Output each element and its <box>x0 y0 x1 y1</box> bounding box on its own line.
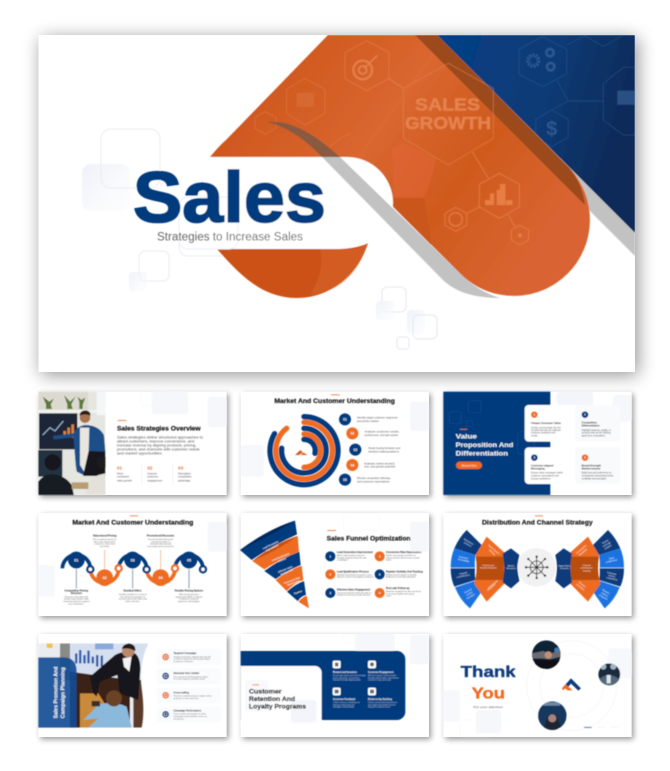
card 3: Customer-aligned <box>531 463 554 467</box>
feature items: Deliver personalized experiences <box>368 701 397 704</box>
funnel items: 2 <box>329 572 331 576</box>
tagline: For your attention <box>473 705 504 709</box>
concentric ring chart <box>270 417 338 485</box>
numbered list: and customer expectations <box>357 480 390 483</box>
left fan <box>451 530 519 608</box>
card 3: Ensure value messages match <box>531 472 564 475</box>
funnel: Improvement <box>265 544 279 552</box>
funnel: Optimization <box>287 579 301 587</box>
slide heading: Customer <box>249 689 282 695</box>
navy panel <box>443 392 550 495</box>
gray diagonal shadow <box>322 157 500 298</box>
funnel items: bottlenecks and drop-off points. <box>386 576 416 579</box>
step captions: stimulate demand and <box>150 543 172 546</box>
stat columns: advantage <box>178 478 191 482</box>
accent dash <box>327 529 336 532</box>
navy band <box>241 651 405 720</box>
decorative squares <box>141 392 177 406</box>
step captions: Combine products or services <box>118 593 147 596</box>
text on hexagon: sales growth <box>405 98 491 130</box>
slide 6: distribution and channel strategy <box>443 513 634 618</box>
blue triangle panel <box>437 35 635 233</box>
fan labels: Omnichannel <box>488 580 499 590</box>
slide 9: thank you: You <box>472 685 505 702</box>
card 4: consistently showcasing brand <box>582 474 614 477</box>
step captions: their value delivered to <box>94 540 116 543</box>
pale square over the pill <box>179 197 238 249</box>
funnel: Pipeline <box>294 590 303 595</box>
fan labels: programs <box>599 594 608 601</box>
stat columns: Strengthen <box>178 471 192 475</box>
fan labels: Reseller <box>602 589 610 595</box>
fan labels: integration <box>487 582 497 592</box>
feature items: Maintain regular communication <box>368 674 396 677</box>
feature items: Encourage repeat purchases through <box>333 674 366 677</box>
photo circle: handshake bottom <box>538 701 567 730</box>
fan labels: performance <box>581 567 594 570</box>
numbered list: Evaluate market demand, <box>364 462 395 465</box>
fan labels: partners <box>463 541 472 548</box>
icons on blue panel: $ <box>546 118 557 140</box>
card 3: customer expectations and <box>531 474 560 477</box>
hero slide <box>38 35 638 375</box>
slide 3: value proposition and differentiation <box>443 392 634 497</box>
step captions: payment flexibility to appeal <box>176 595 203 598</box>
feature items: long-term customer value. <box>368 706 391 709</box>
fan labels: integration <box>578 547 588 557</box>
darker forearm tone <box>392 198 446 260</box>
logo <box>562 678 581 691</box>
card 2: Competitive <box>582 421 597 425</box>
stat columns: 01 <box>117 466 123 471</box>
card 4: Build trust and preference by <box>582 472 612 475</box>
fan labels: coverage <box>602 541 612 548</box>
body text <box>117 435 203 455</box>
feature items: points, discounts, or exclusive <box>333 676 360 679</box>
body text: promotions, and channels with customer needs <box>117 447 200 451</box>
numbered list: 05 <box>343 478 347 482</box>
numbered list: Analyze customer needs, <box>365 431 400 434</box>
numbered list: decision-making patterns <box>368 450 400 453</box>
fan labels: enablement <box>606 558 618 564</box>
slide heading: Loyalty Programs <box>249 705 307 711</box>
step captions: Bundled Offers <box>124 589 142 592</box>
panel heading: Proposition And <box>456 442 513 449</box>
list cards: customer segments and buying stages <box>173 658 210 661</box>
fan labels: resolution <box>466 593 476 600</box>
numbered list: 03 <box>353 448 357 452</box>
blue overlay panel <box>38 657 77 728</box>
fan labels: Sales <box>609 557 615 561</box>
feature items: Reward and Incentive <box>333 671 358 674</box>
step captions: segments and budgets. <box>178 600 201 603</box>
funnel items: Maintain engagement after purchase <box>386 590 422 593</box>
list cards: Seasonal And Limited <box>173 672 200 675</box>
decorative soft squares <box>82 129 437 349</box>
numbered list: 04 <box>350 463 354 467</box>
card 4 <box>575 447 620 484</box>
rotated title: Campaign Planning <box>60 667 66 718</box>
stat columns: customer <box>147 475 158 479</box>
meeting photo <box>38 643 148 728</box>
step captions: to different customer <box>179 598 199 601</box>
fan labels: Channel <box>459 572 468 576</box>
main title: Sales <box>133 159 326 238</box>
card 4: credibility and strengths. <box>582 477 607 480</box>
funnel items: 4 <box>379 554 381 558</box>
card 4: 4 <box>584 456 586 460</box>
funnel items: likely to convert into paying customers. <box>337 576 374 579</box>
connector lines <box>76 569 189 588</box>
fan labels: Retail channel <box>487 544 500 555</box>
fan labels: Channel <box>578 582 586 589</box>
body text: increase revenue by aligning products, pricing, <box>117 443 196 447</box>
fan labels: Omnichannel <box>576 545 588 555</box>
fan labels <box>456 538 618 601</box>
slide heading <box>249 689 307 711</box>
slide heading: Market And Customer Understanding <box>274 399 395 405</box>
orange capsule with photo tint <box>210 35 590 296</box>
step captions: cost alone. <box>99 545 110 548</box>
list cards: Track results and insights to refine <box>173 713 207 716</box>
card 4: Reinforcement <box>582 467 600 471</box>
card 1 <box>525 405 570 442</box>
slide heading: Retention And <box>249 697 295 703</box>
funnel items: 3 <box>329 591 331 595</box>
step captions: Structure <box>71 592 82 595</box>
funnel items: 6 <box>379 591 381 595</box>
step captions: market expectations while <box>64 598 90 601</box>
fan labels: support <box>601 591 609 598</box>
step nodes: 04 <box>159 576 164 580</box>
accent dash <box>460 428 467 431</box>
text on hexagon: sales growth: SALES <box>415 94 480 114</box>
fan labels: Digital Sales <box>558 564 570 567</box>
body text: Sales strategies define structured approaches to <box>117 435 203 439</box>
fan labels: strategy <box>488 549 497 556</box>
slide 2: market and customer understanding rings <box>241 392 431 497</box>
feature items: Relationship Building <box>368 698 392 701</box>
numbered list: preferences, and pain points <box>365 434 399 437</box>
stat columns: consistent <box>117 475 129 479</box>
step captions: key competitors. <box>68 602 85 605</box>
list cards: products to raise deal size. <box>173 697 199 700</box>
fan labels: conflict <box>466 591 473 597</box>
fan labels: tracking <box>583 569 591 572</box>
numbered list <box>339 413 401 486</box>
slide 5: sales funnel optimization <box>240 513 431 618</box>
numbered list: Study buying behavior and <box>368 447 401 450</box>
center logo <box>295 450 308 455</box>
step captions: Flexible Pricing Options <box>175 589 204 592</box>
white title card <box>241 666 322 727</box>
feature items: content to stay connected. <box>368 679 392 682</box>
funnel items: 1 <box>329 554 331 558</box>
card 1: 1 <box>533 413 535 417</box>
feature items: through tailored offers and relevant <box>368 676 399 679</box>
fan labels: cost efficiency <box>456 573 471 579</box>
funnel <box>240 521 309 608</box>
numbered list: 01 <box>343 418 347 422</box>
photo of presenter <box>38 392 109 495</box>
dark shadow band <box>415 35 585 205</box>
card 1: needs. <box>531 435 538 437</box>
button <box>456 462 482 469</box>
feature items: Collect and act on feedback to <box>333 701 361 704</box>
funnel items: reduce friction and increase closed <box>386 556 420 559</box>
card 1: Clearly communicate the key <box>531 426 562 429</box>
step captions: remaining attractive against <box>63 600 90 603</box>
gray diagonal strip <box>560 158 635 256</box>
list cards <box>157 649 221 723</box>
step captions: and special offers to <box>151 540 171 543</box>
funnel items: Attract high-quality prospects <box>337 554 365 557</box>
text on hexagon: sales growth: GROWTH <box>405 113 491 133</box>
funnel items: Conversion Rate Optimization <box>386 551 422 554</box>
slide 1: sales strategies overview <box>38 392 229 497</box>
list cards: Targeted Campaign <box>173 652 197 655</box>
body text: and market opportunities. <box>117 451 163 455</box>
funnel items: Post-sale Follow-up <box>386 587 410 590</box>
funnel items: Effective Sales Engagement <box>337 588 370 591</box>
accent dash <box>118 419 126 422</box>
step captions: Offer tiered pricing or <box>179 593 199 596</box>
lower orange lobe <box>217 243 368 298</box>
winding arcs <box>62 555 203 583</box>
card 1: benefits that directly address <box>531 429 561 432</box>
numbered list: and priority markets <box>357 420 380 423</box>
stat columns: Drive <box>117 471 124 475</box>
photo circle: handshake top <box>532 640 561 670</box>
card 1: Unique Customer Value <box>531 421 561 425</box>
list cards: Cross-selling <box>173 691 190 694</box>
funnel items: sales. <box>386 596 392 598</box>
list cards: to improve response. <box>173 660 194 663</box>
funnel items <box>325 551 423 598</box>
step nodes: 01 <box>74 558 78 562</box>
list cards: Promote complementary or higher value <box>173 695 212 698</box>
funnel: Engagement <box>280 568 294 576</box>
step captions: Set prices that align with <box>65 595 89 598</box>
fan labels: analysis <box>604 545 612 550</box>
stat columns: sales growth <box>117 478 132 482</box>
fan labels: Reseller Network <box>480 567 497 570</box>
numbered list: 02 <box>350 432 354 436</box>
step nodes: 02 <box>103 576 107 580</box>
numbered list: Identify target customer segments <box>357 417 398 420</box>
fan labels: Partner and <box>483 564 495 567</box>
funnel: Lead Generation <box>262 540 280 550</box>
fan labels: Market <box>508 564 515 567</box>
card 1: customer problems and <box>531 432 556 435</box>
funnel: Process <box>278 558 287 563</box>
list cards: investment. <box>173 717 185 720</box>
fan labels: Research <box>506 567 516 570</box>
stat columns: competitive <box>178 475 192 479</box>
stat columns: 03 <box>178 466 184 471</box>
accent dash <box>130 514 138 517</box>
funnel items: Refine messaging and offers to <box>386 554 417 557</box>
step captions: Price products based on <box>93 538 117 541</box>
concentric rings <box>527 641 617 731</box>
fan labels: Channel <box>464 589 473 595</box>
funnel: Conversion Rate <box>284 576 301 585</box>
calendar and chain icons on left orange <box>255 78 350 150</box>
funnel items: deals. <box>386 560 392 562</box>
fan labels: Market <box>602 539 609 545</box>
feature items: Customer Feedback <box>333 698 356 701</box>
fan labels: service <box>608 574 616 579</box>
step captions: customers rather than <box>94 543 116 546</box>
fan labels: Customer <box>459 555 469 560</box>
funnel items: Use personalized communication to <box>337 591 372 594</box>
funnel items: through targeted channels and <box>337 556 367 559</box>
accent dash <box>331 393 340 396</box>
fan labels: Channel <box>583 565 591 567</box>
stat columns: engagement <box>147 478 162 482</box>
panel heading <box>456 433 513 457</box>
subtitle: Strategies to Increase Sales <box>157 232 303 244</box>
icons on blue panel <box>519 35 636 147</box>
card 2: Highlight features, quality, or <box>582 429 611 432</box>
step nodes: 03 <box>131 558 135 562</box>
center circle with network icon <box>517 548 556 587</box>
step nodes <box>68 552 206 586</box>
button: Discover More <box>461 464 477 467</box>
card 2: Differentiation <box>582 424 600 428</box>
step captions: Use time-limited discounts <box>148 538 173 541</box>
right fan <box>555 530 624 608</box>
feature items: improve satisfaction and <box>333 703 354 706</box>
slide heading: Sales Funnel Optimization <box>327 537 411 543</box>
step captions: Competitive Pricing <box>65 589 88 592</box>
slide 4: timeline of pricing <box>38 513 229 618</box>
step captions <box>63 535 204 605</box>
stat columns <box>117 464 192 484</box>
funnel items: Lead Qualification Process <box>337 570 370 573</box>
feature items: rewards that add ongoing value. <box>333 679 362 682</box>
feature items <box>333 661 399 709</box>
step captions: encourage quick purchases. <box>147 545 175 548</box>
funnel items: Identify and prioritize prospects most <box>337 573 373 576</box>
feature items: strengthen relationships. <box>333 706 355 709</box>
accent dash <box>252 683 259 686</box>
step nodes: 05 <box>187 558 191 562</box>
icons on orange panel <box>345 41 529 245</box>
slide 9: thank you <box>443 634 634 739</box>
white pill <box>200 157 393 249</box>
slide heading: Sales Strategies Overview <box>117 427 201 433</box>
fan labels: consistency <box>606 576 618 582</box>
fan labels: Customer <box>607 571 617 576</box>
list cards: campaigns and maximize return on <box>173 715 208 718</box>
card 3: Messaging <box>531 467 545 471</box>
slide 8: customer retention and loyalty programs <box>241 634 431 739</box>
list cards: Campaign Performance <box>173 709 202 712</box>
stat columns: Improve <box>147 471 157 475</box>
list cards: Use seasonal and limited-time offers <box>173 675 208 678</box>
body text: attract customers, improve conversions, and <box>117 439 194 443</box>
dark shadow curve on orange <box>267 122 340 157</box>
numbered list: Monitor competitor offerings <box>357 477 391 480</box>
card 4: Brand Strength <box>582 463 601 467</box>
thank you heading: Thank <box>461 664 516 681</box>
card 3: 3 <box>533 456 535 460</box>
fan labels: incentives <box>576 583 585 592</box>
step captions: into attractive packages to <box>120 595 146 598</box>
card 3 <box>525 447 570 484</box>
card 2: apart from competitors. <box>582 434 606 437</box>
numbered list: size, and growth potential <box>364 466 395 469</box>
funnel items: build trust and move leads forward. <box>337 594 371 597</box>
hand silhouette <box>394 148 436 198</box>
panel heading: Differentiation <box>456 450 508 457</box>
fan labels: Distribution <box>463 538 475 546</box>
step captions: Value-based Pricing <box>93 535 117 538</box>
list cards: Design promotions aligned with specific <box>173 655 212 658</box>
fan labels: Channels <box>560 568 569 570</box>
funnel items: to increase loyalty and repeat <box>386 592 415 595</box>
funnel items: Lead Generation Improvement <box>337 551 373 554</box>
accent dash <box>535 514 543 517</box>
funnel items: Monitor funnel stages to identify <box>386 573 417 576</box>
funnel: Lead Qualification <box>272 552 291 562</box>
rotated title <box>53 667 66 718</box>
funnel: Effective Sales <box>278 565 294 574</box>
step captions: increase perceived value and <box>119 598 147 601</box>
step captions: order amounts. <box>125 600 140 603</box>
feature items: Customer Engagement <box>368 671 394 674</box>
card 3: buying motivations. <box>531 477 551 480</box>
slide 7: sales promotion and campaign planning <box>38 634 229 739</box>
rotated title: Sales Promotion And <box>53 667 59 718</box>
step captions: Promotional Discounts <box>147 535 175 538</box>
slide heading: Market And Customer Understanding <box>72 520 194 526</box>
funnel items: campaigns. <box>337 560 348 562</box>
list cards: to create urgency and drive quick <box>173 678 206 681</box>
funnel items: 5 <box>379 572 381 576</box>
slide heading: Distribution And Channel Strategy <box>482 520 593 526</box>
card 2 <box>575 405 620 442</box>
funnel items: Pipeline Visibility And Tracking <box>386 570 423 573</box>
stat columns: 02 <box>147 466 153 471</box>
pagination dashes <box>584 726 618 729</box>
card 2: 2 <box>584 413 586 417</box>
feature items: and support that build trust and <box>368 703 395 706</box>
fan labels: accessibility <box>457 558 470 563</box>
card 2: services that set the offering <box>582 432 611 435</box>
photo circle: team right <box>598 663 620 685</box>
panel heading: Value <box>456 433 477 440</box>
